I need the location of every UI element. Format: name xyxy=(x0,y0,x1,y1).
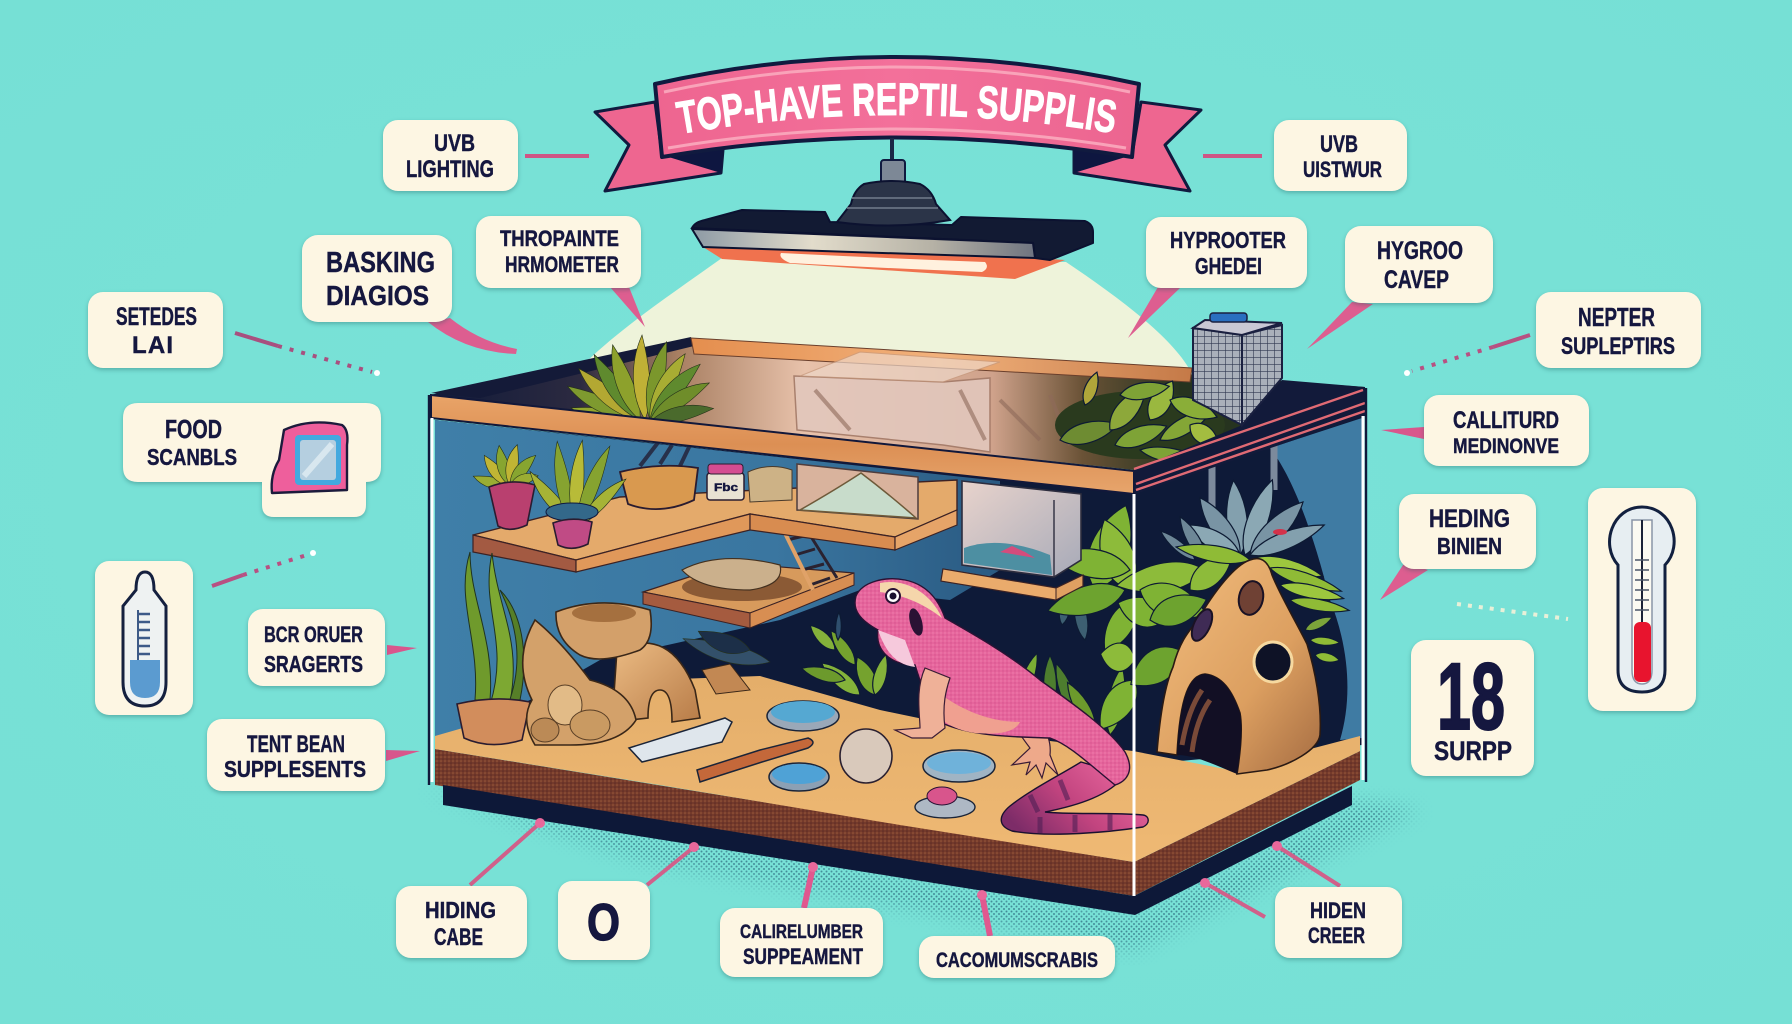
label: basking dragios xyxy=(302,235,452,322)
tank back rail xyxy=(691,338,1192,382)
tank left dark rail xyxy=(431,337,694,398)
log entrance xyxy=(1177,674,1241,774)
label: setedes lai: LAI xyxy=(132,332,173,359)
connector thermopainte xyxy=(610,287,645,327)
lamp underside xyxy=(703,247,1065,279)
right blue wall xyxy=(1270,418,1362,740)
label: hygroo cavep: CAVEP xyxy=(1384,266,1449,294)
lizard tail xyxy=(1001,762,1148,834)
label: food scanbls with icon xyxy=(123,403,381,517)
label: tent bean supplesents: SUPPLESENTS xyxy=(224,756,366,782)
label: thropainte hrmometer: HRMOMETER xyxy=(505,252,619,277)
label: hiding cabe: CABE xyxy=(434,924,483,951)
card: number 18 surpp: SURPP xyxy=(1434,736,1512,766)
label: calliturd medinonve xyxy=(1424,395,1589,466)
grey blue plant xyxy=(1157,476,1327,564)
large leaves at corner xyxy=(1044,499,1240,737)
lamp dome xyxy=(837,181,950,226)
label: uvb lighting xyxy=(383,120,518,191)
gadget xyxy=(629,718,732,762)
lamp glow tube xyxy=(780,253,987,272)
label: food scanbls with icon: FOOD xyxy=(165,414,222,444)
label: uvb uistwur xyxy=(1274,120,1407,191)
connector hiden lower xyxy=(1200,878,1265,917)
label: calirelumber suppeament: CALIRELUMBER xyxy=(740,922,863,943)
card: number 18 surpp xyxy=(1411,640,1534,776)
lower shelf xyxy=(643,516,854,628)
title banner xyxy=(594,55,1202,192)
label: calirelumber suppeament xyxy=(720,908,883,977)
supplement jar xyxy=(707,464,744,500)
banner title text: TOP-HAVE REPTIL SUPPLIS xyxy=(674,82,1116,134)
UVB lamp xyxy=(692,138,1093,279)
tank right rail xyxy=(1134,380,1365,494)
icon: food dish xyxy=(272,422,347,493)
water dish two xyxy=(769,763,829,791)
label: hyprooter ghedei: GHEDEI xyxy=(1195,253,1262,279)
label: uvb lighting: LIGHTING xyxy=(406,156,494,183)
banner right tail xyxy=(1074,102,1201,191)
tank front rail xyxy=(431,395,1134,494)
hollow log hide xyxy=(1157,559,1320,774)
connector uvb left xyxy=(525,154,589,158)
lizard belly xyxy=(935,690,1020,734)
dark fern xyxy=(680,625,772,694)
egg xyxy=(840,729,892,783)
ladder xyxy=(778,516,837,590)
top right foliage xyxy=(1055,370,1225,469)
label: basking dragios: DIAGIOS xyxy=(326,280,429,311)
connector thermometer dots xyxy=(1457,604,1568,619)
connector heding xyxy=(1380,562,1428,600)
card: red thermometer xyxy=(1588,488,1696,711)
centre glass tank with mountain xyxy=(797,464,918,519)
label: tent bean supplesents: TENT BEAN xyxy=(247,731,345,758)
tank top interior xyxy=(430,338,1365,470)
label: uvb lighting: UVB xyxy=(434,130,475,157)
connector calirelumber xyxy=(804,862,818,908)
lizard head highlight xyxy=(880,582,942,618)
lizard beard xyxy=(878,630,915,667)
label: hiden creer xyxy=(1275,887,1402,958)
tan rocks xyxy=(748,466,792,502)
tank dark edges xyxy=(429,388,1366,785)
top plant xyxy=(563,335,715,429)
connector setedes xyxy=(235,333,380,376)
connector nepter xyxy=(1404,335,1530,376)
lizard eye xyxy=(886,589,900,603)
connector hygroo xyxy=(1307,302,1373,349)
label: hiding cabe xyxy=(396,886,527,958)
humidifier cap xyxy=(1210,313,1247,322)
label: hyprooter ghedei: HYPROOTER xyxy=(1170,227,1286,253)
label: cacomumscrabis xyxy=(919,936,1115,978)
label: setedes lai xyxy=(88,292,223,368)
tank base xyxy=(443,785,1352,915)
upper glass box xyxy=(794,352,1070,452)
label: thropainte hrmometer: THROPAINTE xyxy=(500,226,619,251)
water dish three xyxy=(923,750,995,782)
label: calliturd medinonve: CALLITURD xyxy=(1453,407,1559,434)
label: bcr oruer sragerts: SRAGERTS xyxy=(264,651,363,677)
card: number 18 surpp: 18 xyxy=(1437,644,1505,750)
label: heding binien: BINIEN xyxy=(1437,533,1502,559)
label: calliturd medinonve: MEDINONVE xyxy=(1453,435,1559,458)
upper shelf xyxy=(473,480,957,572)
label: calirelumber suppeament: SUPPEAMENT xyxy=(743,944,863,969)
icon: bottle xyxy=(123,572,166,706)
label: nepter supleptirs: NEPTER xyxy=(1578,302,1655,332)
label: zero: O xyxy=(587,894,620,952)
seaweed plant in pot xyxy=(457,552,530,745)
connector hiden top xyxy=(1272,841,1340,886)
halftone floor shadow xyxy=(439,790,1420,960)
label: hiding cabe: HIDING xyxy=(425,897,496,923)
humidifier box xyxy=(1193,313,1282,425)
label: cacomumscrabis: CACOMUMSCRABIS xyxy=(936,949,1098,972)
log holes xyxy=(1236,579,1266,617)
label: uvb uistwur: UISTWUR xyxy=(1303,157,1382,182)
shelf plants and pots xyxy=(472,440,792,548)
rock pile xyxy=(523,620,636,745)
connector basking xyxy=(428,318,517,354)
label: hygroo cavep xyxy=(1345,226,1493,303)
floor items xyxy=(629,701,995,818)
wood pot xyxy=(620,440,698,509)
connector zero xyxy=(647,842,699,885)
label: hiden creer: HIDEN xyxy=(1310,898,1366,923)
lizard body xyxy=(855,579,1130,785)
label: thropainte hrmometer xyxy=(476,216,641,288)
left blue wall xyxy=(435,420,1000,745)
connector tent xyxy=(386,750,420,761)
label: heding binien xyxy=(1399,494,1536,569)
lizard front leg xyxy=(895,668,950,738)
tank sand floor xyxy=(435,676,1360,862)
banner left tail xyxy=(595,102,723,191)
shelf dirt and wood pile xyxy=(682,573,802,601)
front pot plant xyxy=(524,440,629,548)
label: heding binien: HEDING xyxy=(1429,505,1510,533)
label: uvb uistwur: UVB xyxy=(1320,131,1358,158)
connector hyprooter xyxy=(1128,287,1180,338)
connector uvb right xyxy=(1203,154,1262,158)
support posts xyxy=(1212,425,1274,520)
connector calliturd xyxy=(1381,427,1424,439)
light cone xyxy=(586,258,1190,370)
food dish xyxy=(915,787,975,818)
lizard xyxy=(855,579,1148,834)
card: bottle thermometer xyxy=(95,561,193,715)
lamp metal strip xyxy=(692,229,1035,258)
label: hiden creer: CREER xyxy=(1308,923,1365,948)
label: nepter supleptirs xyxy=(1536,292,1701,368)
banner ribbon xyxy=(655,57,1139,157)
tank soil front xyxy=(435,749,1360,896)
label: basking dragios: BASKING xyxy=(326,247,435,279)
small right shelf xyxy=(941,569,1083,600)
cave arch xyxy=(612,643,700,722)
label: bcr oruer sragerts: BCR ORUER xyxy=(264,622,363,647)
label: zero xyxy=(558,881,650,960)
plant pot xyxy=(457,699,530,745)
connector lines xyxy=(212,156,1568,936)
right glass tank xyxy=(962,481,1081,577)
tool xyxy=(697,738,813,782)
lamp housing xyxy=(692,210,1093,260)
connector bcr xyxy=(387,645,417,655)
connector cacomums xyxy=(977,890,990,936)
label: setedes lai: SETEDES xyxy=(116,303,197,331)
tank interior back xyxy=(435,416,1362,765)
lizard rear leg foot xyxy=(1012,710,1058,778)
log top foliage xyxy=(1175,539,1350,665)
label: food scanbls with icon: SCANBLS xyxy=(147,444,237,470)
lamp rod xyxy=(890,138,894,162)
supplement jar: Fbc xyxy=(714,482,738,494)
label: nepter supleptirs: SUPLEPTIRS xyxy=(1561,333,1675,360)
connector hiding xyxy=(470,818,545,885)
label: hyprooter ghedei xyxy=(1146,217,1307,288)
pink pot plant xyxy=(472,443,540,529)
label: tent bean supplesents xyxy=(207,719,385,791)
water dish one xyxy=(767,701,839,731)
connector bottle xyxy=(212,550,316,586)
glass edges xyxy=(432,416,1363,896)
banner folds xyxy=(662,148,1132,173)
rock arch and bowl xyxy=(523,603,700,745)
icon: thermometer xyxy=(1610,507,1674,692)
label: bcr oruer sragerts xyxy=(248,609,385,686)
label: hygroo cavep: HYGROO xyxy=(1377,237,1463,265)
rock bowl xyxy=(556,603,651,659)
lizard ear xyxy=(907,607,925,637)
green background leaves xyxy=(800,590,1130,736)
